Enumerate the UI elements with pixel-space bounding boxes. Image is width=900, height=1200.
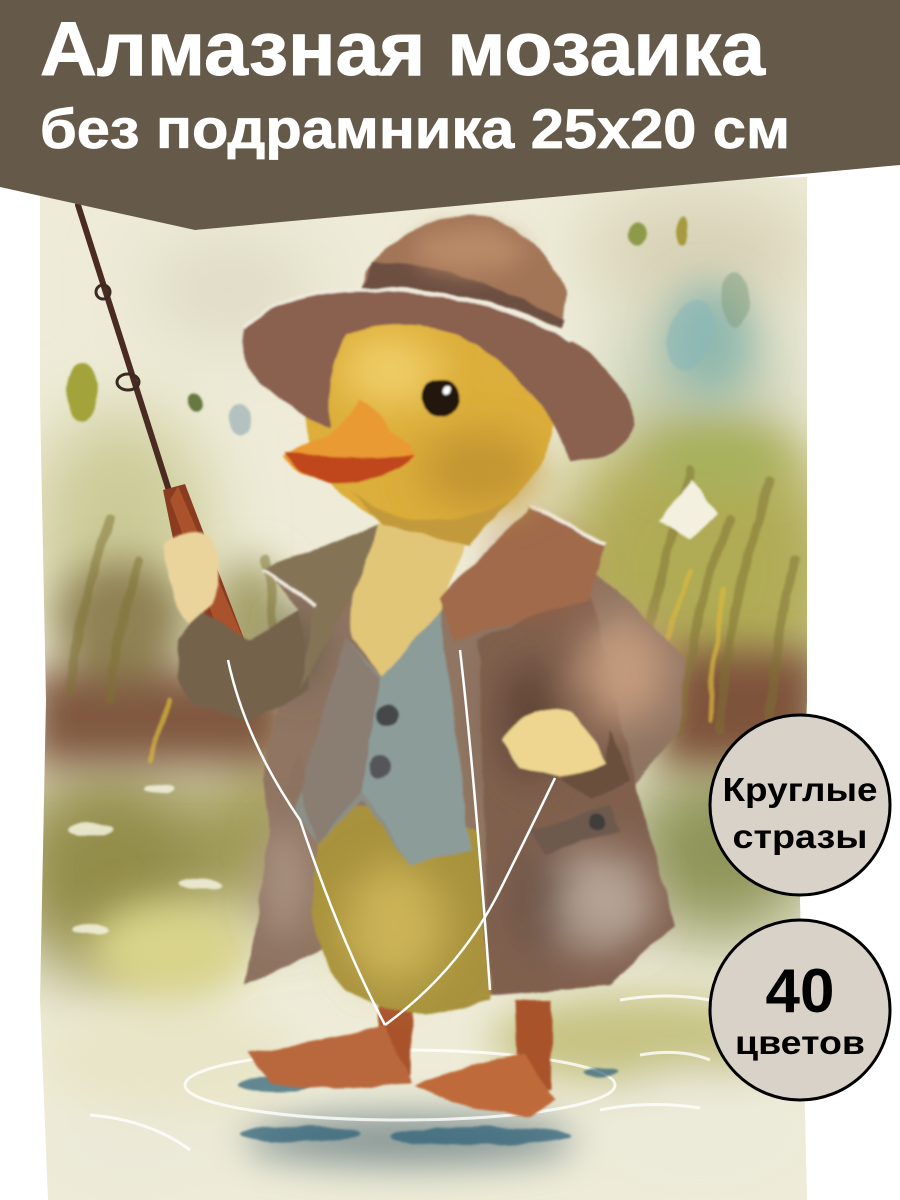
badge: round rhinestones: Круглые <box>722 771 878 808</box>
duck head <box>306 303 554 545</box>
left wing hand <box>165 532 218 625</box>
coat <box>246 505 685 995</box>
waistcoat <box>295 610 470 865</box>
subtitle: без подрамника 25х20 см <box>40 97 790 160</box>
water reflections <box>240 1068 618 1145</box>
badge: 40 colours: 40 <box>766 957 834 1026</box>
left sleeve <box>178 610 310 722</box>
badge: round rhinestones: стразы <box>732 818 868 855</box>
duck eye <box>420 381 460 415</box>
title: Алмазная мозаика <box>40 7 766 92</box>
fishing rod <box>78 205 249 676</box>
duck belly and chest <box>312 500 490 1013</box>
header banner <box>0 0 900 230</box>
duck beak <box>282 400 415 482</box>
water ripples <box>90 996 730 1150</box>
right wing hand <box>502 709 630 800</box>
badge: 40 colours: цветов <box>735 1024 865 1061</box>
white paint spots on water <box>68 786 222 935</box>
coat collars <box>262 505 605 690</box>
hat <box>243 213 635 462</box>
decorative leaves <box>67 215 748 540</box>
badge: 40 colours <box>710 920 890 1100</box>
fishing line <box>228 650 555 1025</box>
duck figure <box>165 213 685 1116</box>
duck legs and feet <box>248 1000 555 1116</box>
badge: round rhinestones <box>710 715 890 895</box>
coat pocket <box>530 805 620 855</box>
